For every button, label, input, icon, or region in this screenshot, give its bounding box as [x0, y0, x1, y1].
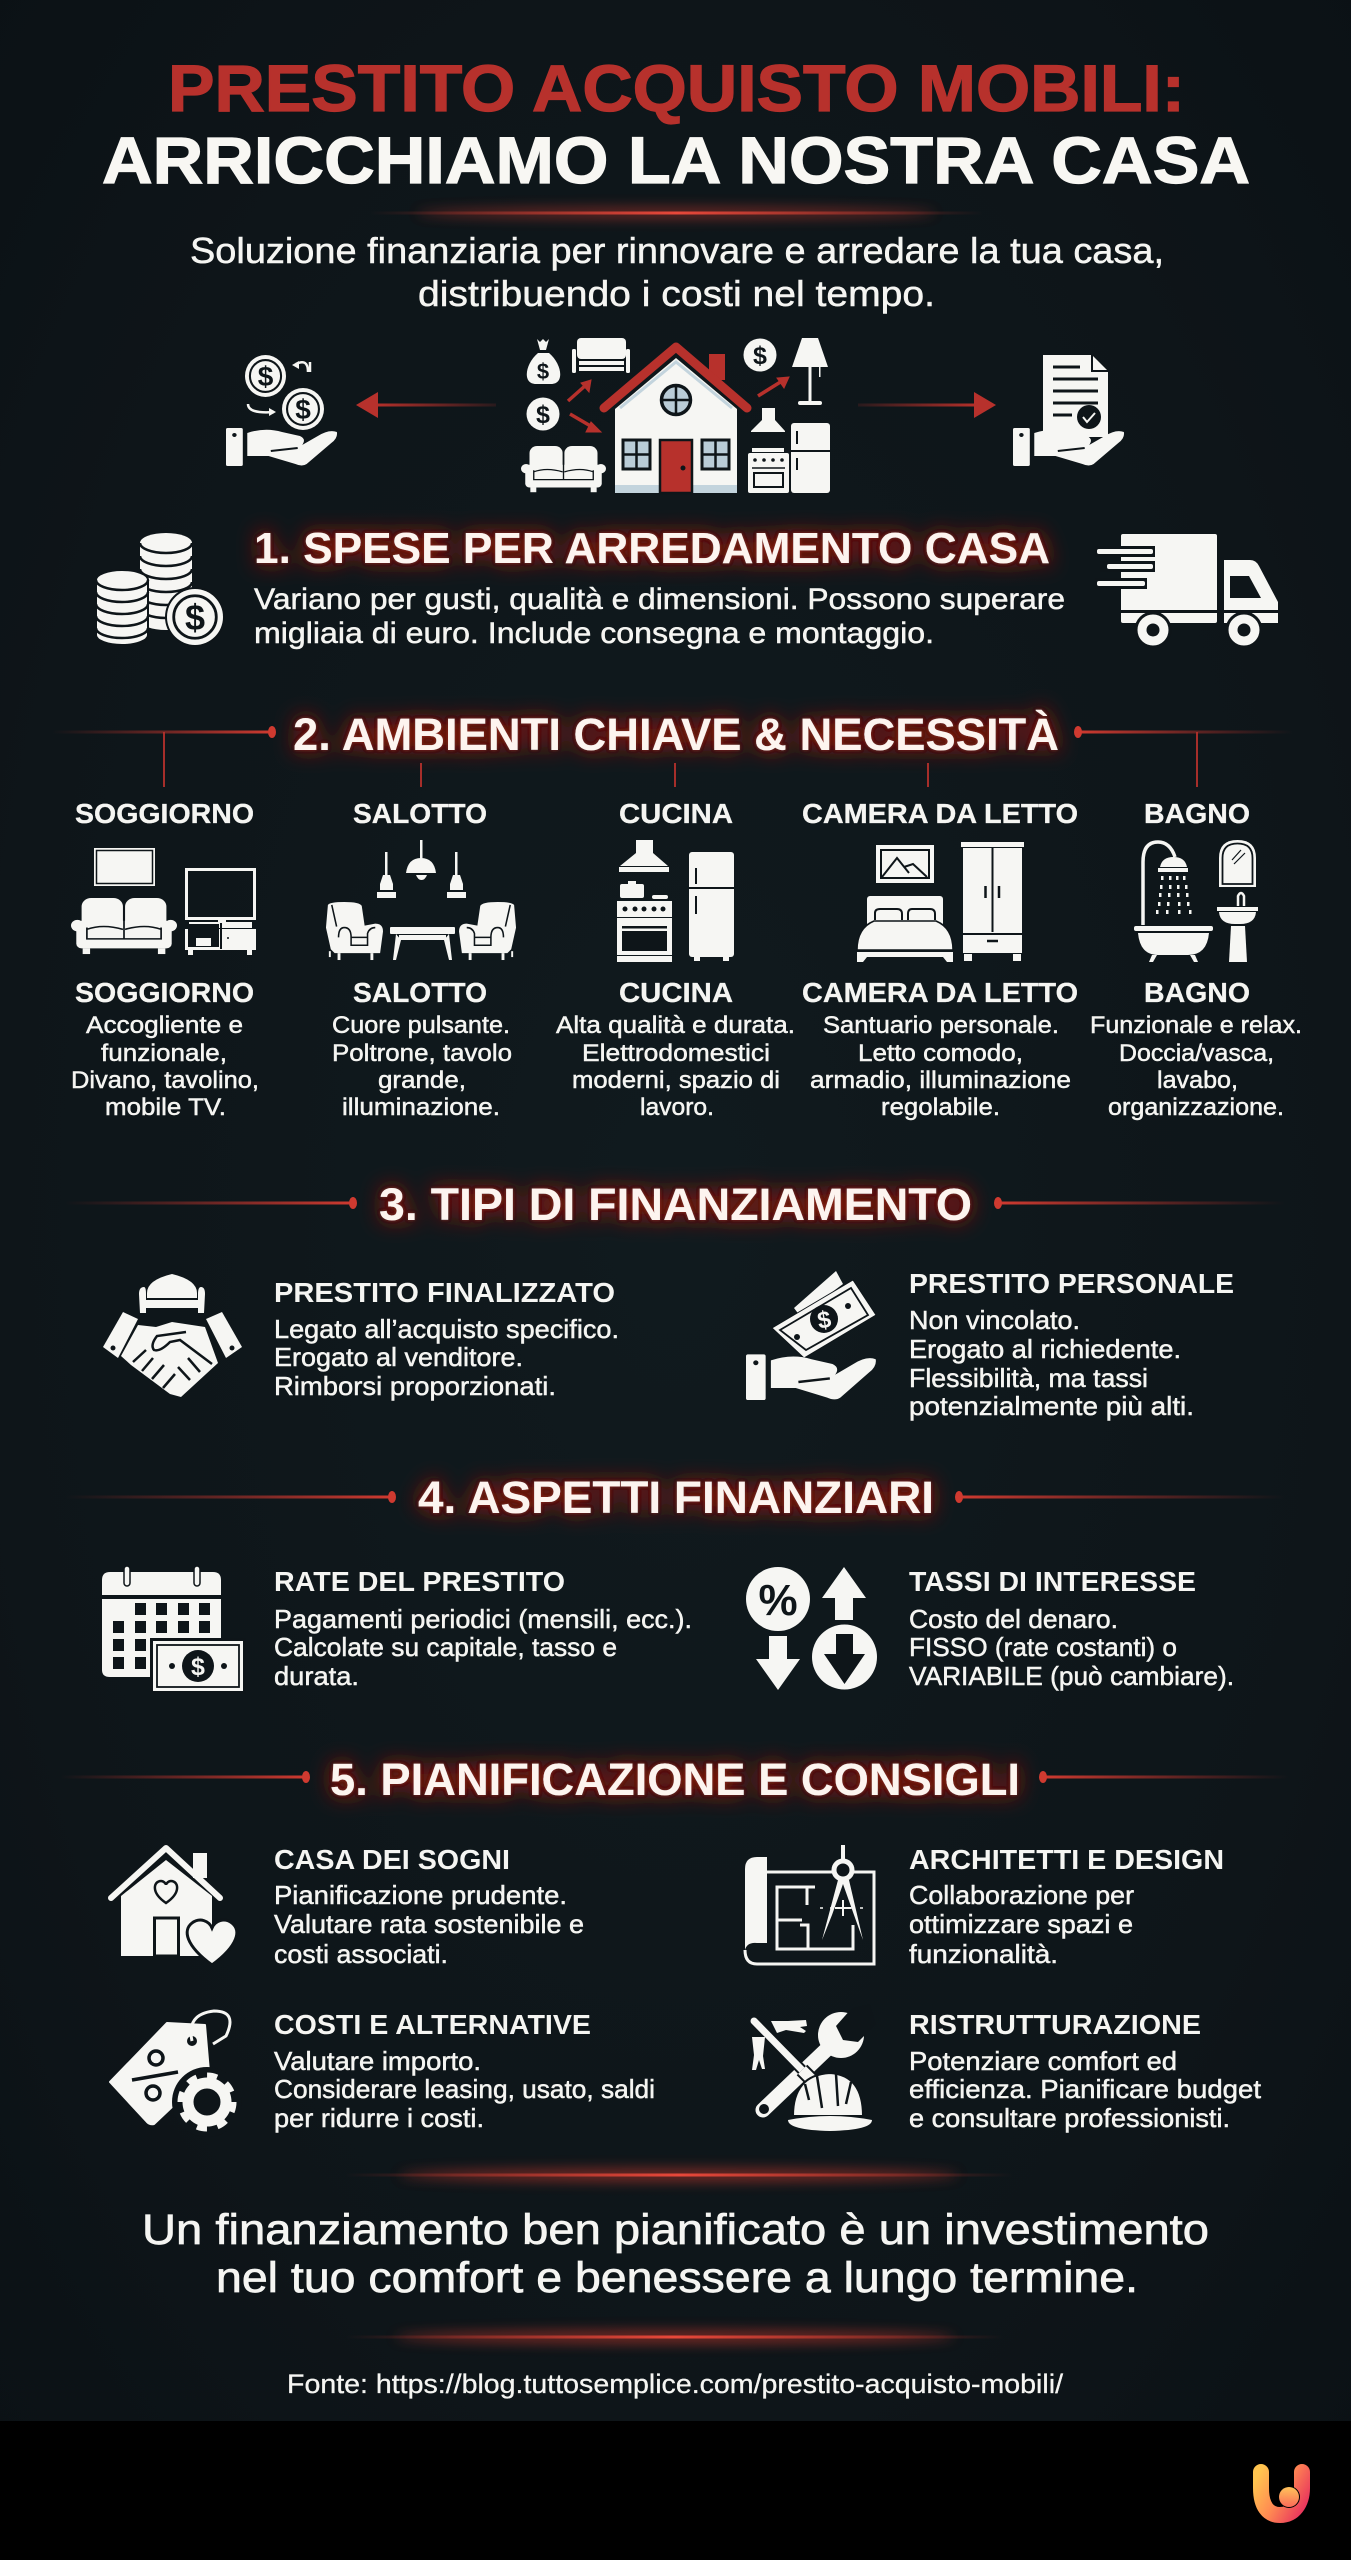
description: mobile TV.	[105, 1094, 226, 1121]
section 1	[96, 524, 1278, 650]
icon: interest rates: %	[758, 1576, 798, 1625]
icon: money bag	[527, 339, 560, 384]
item text: Valutare rata sostenibile e	[274, 1909, 584, 1939]
icon: calendar with banknote	[102, 1566, 246, 1694]
icon: interest rates	[746, 1567, 877, 1690]
item text: FISSO (rate costanti) o	[909, 1632, 1177, 1662]
item text: durata.	[274, 1661, 359, 1691]
subtitle: Soluzione finanziaria per rinnovare e arredare la tua casa,	[190, 230, 1164, 271]
description	[71, 1012, 259, 1121]
item text	[274, 1314, 619, 1401]
item text	[909, 1880, 1134, 1969]
text block	[254, 583, 1065, 650]
item text: Considerare leasing, usato, saldi	[274, 2074, 655, 2104]
description: illuminazione.	[342, 1094, 500, 1121]
item: tassi di interesse	[746, 1566, 1234, 1691]
label: BAGNO	[1144, 798, 1250, 829]
icon: bathroom	[1134, 840, 1258, 962]
icon: hand with coins	[226, 355, 337, 466]
item title: CASA DEI SOGNI	[274, 1844, 510, 1875]
icon: small sofa	[572, 338, 630, 373]
item text: Pagamenti periodici (mensili, ecc.).	[274, 1604, 692, 1634]
icon: hand with banknote: $	[815, 1306, 834, 1335]
title: ARRICCHIAMO LA NOSTRA CASA	[102, 123, 1250, 197]
title	[102, 51, 1250, 197]
icon: house with heart	[111, 1848, 237, 1965]
section 4	[65, 1472, 1285, 1694]
description: lavoro.	[640, 1094, 714, 1121]
arrow: right	[858, 392, 996, 418]
icon: calendar with banknote: $	[191, 1653, 205, 1681]
item text: costi associati.	[274, 1939, 448, 1969]
icon: coin stacks: $	[185, 597, 205, 638]
source line: Fonte: https://blog.tuttosemplice.com/prestito-acquisto-mobili/	[287, 2369, 1064, 2399]
icon: contract in hand	[1013, 355, 1124, 466]
label: CAMERA DA LETTO	[802, 798, 1078, 829]
heading: 5. PIANIFICAZIONE E CONSIGLI	[330, 1754, 1020, 1805]
item text: ottimizzare spazi e	[909, 1909, 1133, 1939]
icon: bedroom	[857, 842, 1024, 962]
item text: Calcolate su capitale, tasso e	[274, 1632, 617, 1662]
column: soggiorno	[71, 798, 259, 1121]
item text: VARIABILE (può cambiare).	[909, 1661, 1234, 1691]
icon: delivery truck	[1095, 534, 1278, 647]
text block: migliaia di euro. Include consegna e montaggio.	[254, 617, 934, 650]
icon: money bag: $	[537, 359, 549, 384]
item text	[909, 1305, 1194, 1421]
subtitle	[190, 230, 1164, 314]
icon: house	[604, 347, 747, 493]
label: CUCINA	[619, 977, 733, 1008]
icon: hood, stove and fridge	[748, 408, 830, 493]
icon: coin left	[526, 398, 560, 430]
item title: TASSI DI INTERESSE	[909, 1566, 1196, 1597]
description	[556, 1012, 795, 1121]
description: regolabile.	[881, 1094, 1000, 1121]
description	[332, 1012, 512, 1121]
icon: hand with banknote	[746, 1271, 876, 1400]
description	[1090, 1012, 1302, 1121]
description: Poltrone, tavolo	[332, 1040, 512, 1067]
item text	[274, 1604, 692, 1691]
icon: hand with coins: $	[258, 361, 274, 392]
icon: blueprint and compass	[745, 1845, 874, 1964]
icon: price tag and gear	[110, 2011, 242, 2137]
icon: tools and helmet	[752, 2004, 876, 2131]
item title: PRESTITO FINALIZZATO	[274, 1277, 615, 1308]
item text	[274, 2046, 655, 2133]
item text: Flessibilità, ma tassi	[909, 1363, 1148, 1393]
closing statement: nel tuo comfort e benessere a lungo termine.	[216, 2254, 1138, 2302]
item text: per ridurre i costi.	[274, 2103, 484, 2133]
label: SOGGIORNO	[75, 977, 254, 1008]
bottom black band	[0, 2421, 1351, 2560]
heading: 1. SPESE PER ARREDAMENTO CASA	[254, 524, 1050, 573]
icon: lounge	[326, 840, 516, 960]
arrow: left	[356, 392, 496, 418]
icon: coin stacks	[96, 533, 225, 647]
description: Santuario personale.	[823, 1012, 1059, 1039]
description: grande,	[378, 1067, 466, 1094]
label: SOGGIORNO	[75, 798, 254, 829]
description: Doccia/vasca,	[1119, 1040, 1274, 1067]
text block: Variano per gusti, qualità e dimensioni. Possono superare	[254, 583, 1065, 616]
item text	[909, 1604, 1234, 1691]
icon: kitchen	[617, 840, 734, 962]
description: Elettrodomestici	[582, 1040, 770, 1067]
item text: funzionalità.	[909, 1939, 1058, 1969]
icon: lamp	[792, 338, 828, 405]
description: funzionale,	[101, 1040, 227, 1067]
item: prestito finalizzato	[103, 1274, 619, 1401]
section 5	[60, 1754, 1289, 2137]
item text: Valutare importo.	[274, 2046, 481, 2076]
item text: Rimborsi proporzionati.	[274, 1371, 556, 1401]
item: casa dei sogni	[111, 1844, 584, 1969]
label: SALOTTO	[353, 977, 487, 1008]
section 2	[52, 709, 1302, 1121]
description: Accogliente e	[86, 1012, 243, 1039]
subtitle: distribuendo i costi nel tempo.	[418, 273, 935, 314]
description: Letto comodo,	[858, 1040, 1023, 1067]
item: costi e alternative	[110, 2009, 655, 2137]
icon: hand with coins: $	[295, 394, 311, 425]
item text: Non vincolato.	[909, 1305, 1080, 1335]
icon: coin right	[744, 338, 776, 372]
heading: 2. AMBIENTI CHIAVE & NECESSITÀ	[293, 709, 1059, 760]
item text: Pianificazione prudente.	[274, 1880, 567, 1910]
column: salotto	[326, 798, 516, 1121]
column: cucina	[556, 798, 795, 1121]
logo	[1261, 2472, 1302, 2515]
item text: e consultare professionisti.	[909, 2103, 1230, 2133]
icon: red mini arrows	[568, 377, 789, 432]
icon: handshake with armchair	[103, 1274, 242, 1397]
icon: coin right: $	[753, 342, 767, 370]
item title: RATE DEL PRESTITO	[274, 1566, 565, 1597]
icon: coin left: $	[536, 401, 550, 429]
description: lavabo,	[1157, 1067, 1238, 1094]
description: armadio, illuminazione	[810, 1067, 1071, 1094]
item text: Erogato al venditore.	[274, 1342, 523, 1372]
icon: large sofa	[521, 446, 606, 492]
closing statement	[142, 2206, 1209, 2302]
title: PRESTITO ACQUISTO MOBILI:	[168, 51, 1185, 125]
item: prestito personale	[746, 1268, 1234, 1421]
description: Alta qualità e durata.	[556, 1012, 795, 1039]
item: architetti e design	[745, 1844, 1224, 1969]
column: camera da letto	[802, 798, 1078, 1121]
description	[810, 1012, 1071, 1121]
item: ristrutturazione	[752, 2004, 1262, 2133]
description: Funzionale e relax.	[1090, 1012, 1302, 1039]
item text	[909, 2046, 1262, 2133]
icon: living room	[71, 848, 256, 955]
item text: Legato all’acquisto specifico.	[274, 1314, 619, 1344]
item text: Potenziare comfort ed	[909, 2046, 1177, 2076]
closing statement: Un finanziamento ben pianificato è un investimento	[142, 2206, 1209, 2254]
description: Cuore pulsante.	[332, 1012, 510, 1039]
item text: Costo del denaro.	[909, 1604, 1118, 1634]
heading: 3. TIPI DI FINANZIAMENTO	[379, 1179, 972, 1230]
column: bagno	[1090, 798, 1302, 1121]
item text: Erogato al richiedente.	[909, 1334, 1181, 1364]
item text: efficienza. Pianificare budget	[909, 2074, 1262, 2104]
item title: COSTI E ALTERNATIVE	[274, 2009, 591, 2040]
label: CUCINA	[619, 798, 733, 829]
label: SALOTTO	[353, 798, 487, 829]
label: CAMERA DA LETTO	[802, 977, 1078, 1008]
item title: ARCHITETTI E DESIGN	[909, 1844, 1224, 1875]
item text: potenzialmente più alti.	[909, 1391, 1194, 1421]
item text	[274, 1880, 584, 1969]
item title: PRESTITO PERSONALE	[909, 1268, 1234, 1299]
description: Divano, tavolino,	[71, 1067, 259, 1094]
description: organizzazione.	[1108, 1094, 1284, 1121]
item text: Collaborazione per	[909, 1880, 1134, 1910]
label: BAGNO	[1144, 977, 1250, 1008]
icon: central house with furniture	[521, 338, 830, 493]
item title: RISTRUTTURAZIONE	[909, 2009, 1201, 2040]
section 3	[65, 1179, 1285, 1421]
description: moderni, spazio di	[572, 1067, 780, 1094]
item: rate del prestito	[102, 1566, 692, 1694]
heading: 4. ASPETTI FINANZIARI	[418, 1472, 934, 1523]
